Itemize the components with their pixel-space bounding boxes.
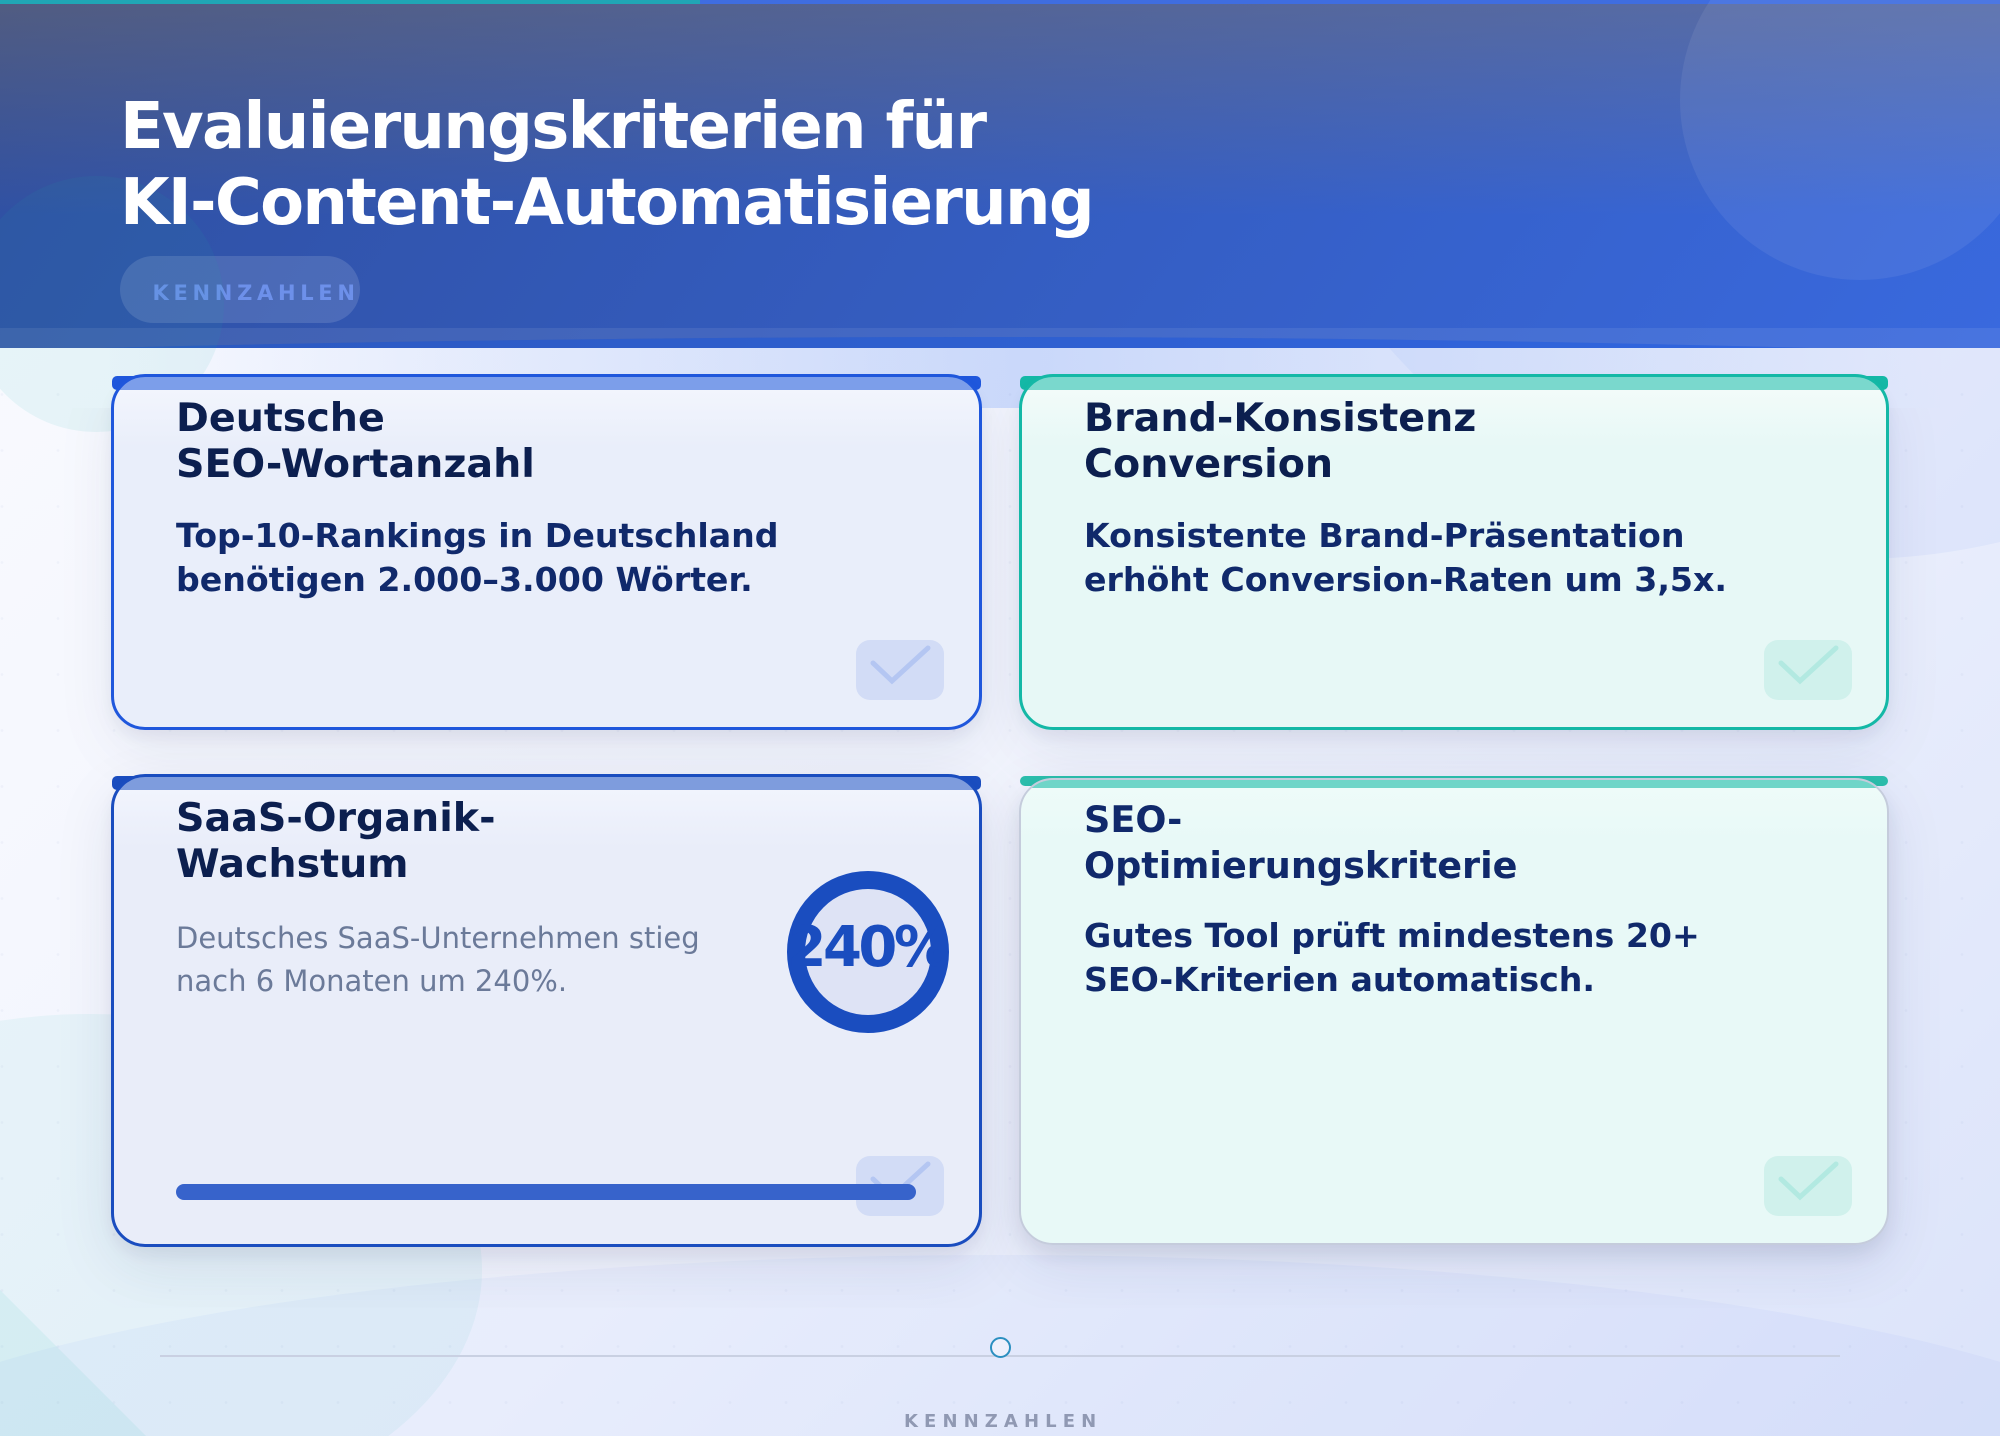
body text: nach 6 Monaten um 240%. (176, 964, 567, 998)
pill label: KENNZAHLEN (152, 281, 360, 305)
panel: SEO-Optimierungskriterie (1018, 776, 1890, 1256)
stat ring 240% (787, 871, 949, 1033)
stat value: 240% (788, 914, 947, 980)
body text (1084, 916, 1700, 999)
body text (176, 920, 700, 998)
footer label: KENNZAHLEN (904, 1411, 1102, 1432)
body text: Deutsches SaaS-Unternehmen stieg (176, 920, 700, 954)
title (120, 90, 1093, 240)
icon: check badge (856, 640, 944, 700)
card shadows clipped to content area (103, 428, 1897, 1274)
footer divider with marker (160, 1337, 1840, 1358)
heading (1084, 798, 1517, 886)
heading (176, 395, 535, 487)
header bottom wave (0, 328, 2000, 348)
title: KI-Content-Automatisierung (120, 166, 1093, 240)
body text: Top-10-Rankings in Deutschland (176, 516, 779, 555)
body text: SEO-Kriterien automatisch. (1084, 960, 1595, 999)
heading: Deutsche (176, 395, 385, 441)
body text: erhöht Conversion-Raten um 3,5x. (1084, 560, 1727, 599)
heading: SEO-Wortanzahl (176, 441, 535, 487)
decorative teal circle (0, 176, 224, 432)
header top accent bar (0, 0, 2000, 4)
heading (1084, 395, 1476, 487)
body text: Gutes Tool prüft mindestens 20+ (1084, 916, 1700, 955)
heading: SEO- (1084, 798, 1182, 840)
category pill (120, 256, 360, 323)
icon: check badge (1764, 1156, 1852, 1216)
heading: SaaS-Organik- (176, 795, 496, 841)
icon: check badge (856, 1156, 944, 1216)
body text: Konsistente Brand-Präsentation (1084, 516, 1684, 555)
header banner (0, 0, 2000, 348)
heading: Optimierungskriterie (1084, 844, 1517, 886)
body text (1084, 516, 1727, 599)
heading: Wachstum (176, 841, 408, 887)
marker circle (990, 1337, 1010, 1358)
decorative header circle (1680, 0, 2000, 280)
icon: check badge (1764, 640, 1852, 700)
panel: Deutsche SEO-Wortanzahl (111, 374, 982, 735)
heading: Conversion (1084, 441, 1333, 487)
panel: SaaS-Organik-Wachstum (111, 774, 982, 1250)
body text (176, 516, 779, 599)
heading (176, 795, 496, 887)
panel: Brand-Konsistenz Conversion (1019, 374, 1889, 735)
progress bar (176, 1184, 916, 1200)
body text: benötigen 2.000–3.000 Wörter. (176, 560, 753, 599)
heading: Brand-Konsistenz (1084, 395, 1476, 441)
title: Evaluierungskriterien für (120, 90, 985, 164)
